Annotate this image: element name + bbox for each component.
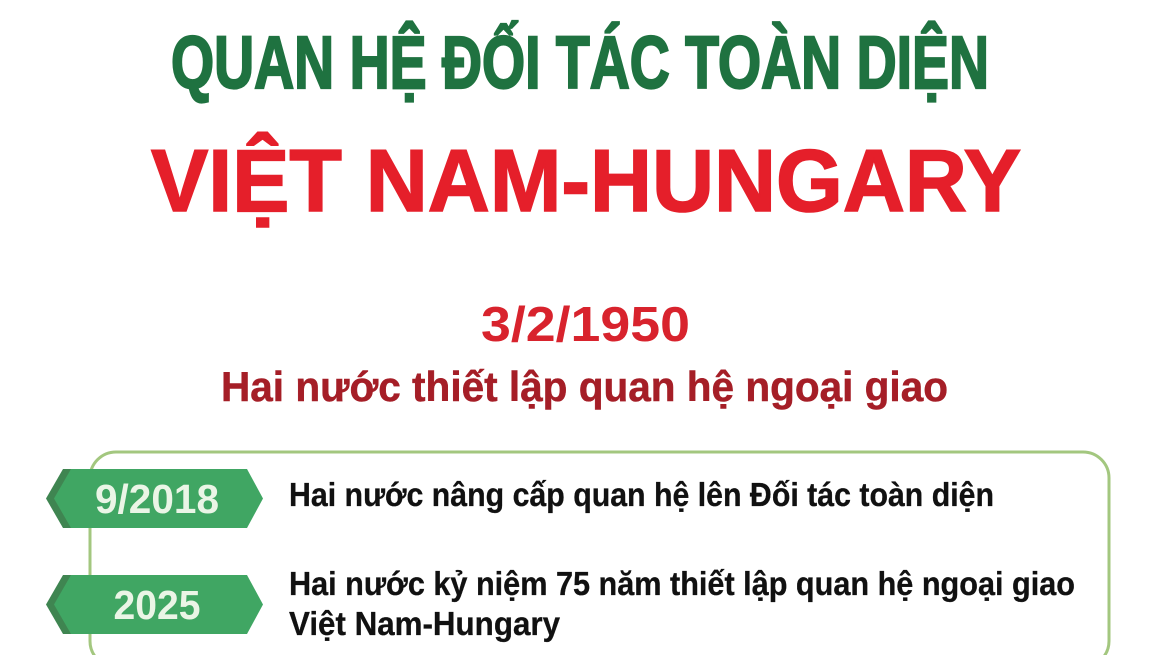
badge: 2025: 2025 bbox=[114, 582, 200, 628]
text: 2025 event bbox=[289, 565, 1075, 642]
badge: 2025 bbox=[46, 575, 263, 634]
badge: 9/2018: 9/2018 bbox=[95, 476, 219, 522]
title: line 2: VIỆT NAM-HUNGARY bbox=[151, 131, 1021, 230]
date: establishment of relations: 3/2/1950 bbox=[481, 298, 690, 352]
panel: timeline bbox=[46, 452, 1109, 655]
text: 2025 event: Việt Nam-Hungary bbox=[289, 605, 561, 642]
subtitle: establishment of relations: Hai nước thiết lập quan hệ ngoại giao bbox=[221, 363, 948, 410]
badge: 9/2018 bbox=[46, 469, 263, 528]
panel outline bbox=[90, 452, 1109, 655]
text: 2018 event: Hai nước nâng cấp quan hệ lên Đối tác toàn diện bbox=[289, 476, 994, 513]
text: 2025 event: Hai nước kỷ niệm 75 năm thiết lập quan hệ ngoại giao bbox=[289, 565, 1075, 602]
